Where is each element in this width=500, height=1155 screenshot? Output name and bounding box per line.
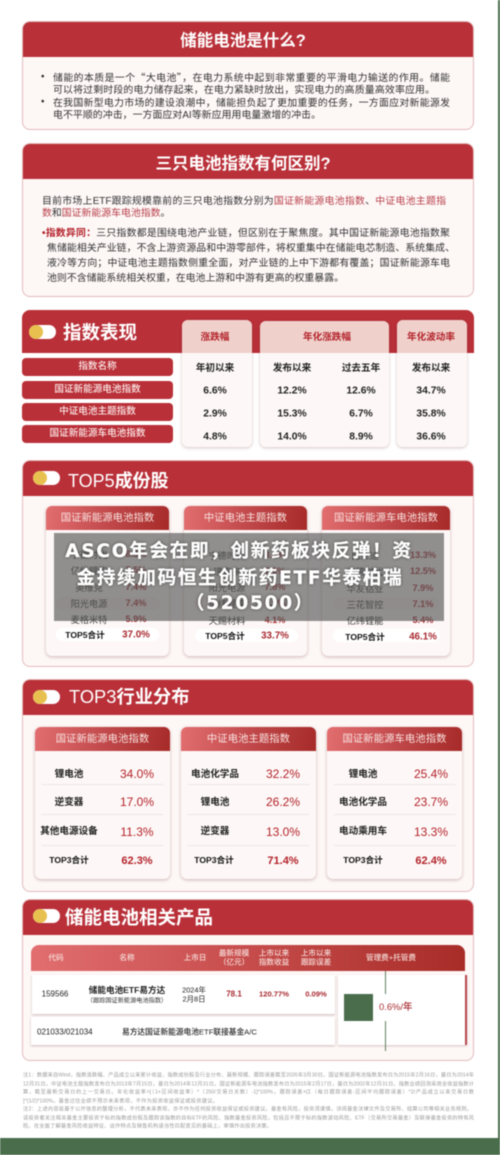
green marker line top bbox=[385, 971, 386, 994]
table row: 159566: 0.09% bbox=[305, 990, 327, 998]
table row: 159566: 2024年 bbox=[182, 986, 206, 994]
row label: CSI battery theme index bbox=[22, 403, 173, 421]
card: CSI battery theme top 5: 璞泰来 bbox=[213, 567, 241, 577]
card: CNI NEV battery top 5: 46.1% bbox=[409, 632, 437, 642]
table header: 上市以来 bbox=[301, 948, 331, 958]
column: price change bbox=[182, 320, 252, 447]
text block: index differences: 焦储能相关产业链，不含上游资源品和中游零部件，将权重集中在储能电芯制造、系统集成、 bbox=[47, 242, 455, 254]
card: CSI battery theme top 3 sectors: 逆变器 bbox=[201, 826, 229, 837]
card: CNI battery top 3 sectors: 国证新能源电池指数 bbox=[56, 734, 149, 745]
icon: toggle bbox=[33, 690, 60, 704]
column: price change: 2.9% bbox=[203, 408, 227, 420]
card: CNI NEV battery top 5 bbox=[322, 506, 450, 656]
panel: what is a storage battery bbox=[22, 21, 474, 130]
text block: storage battery explanation: 电不平顺的冲击，一方面应对AI等新应用用电量激增的冲击。 bbox=[53, 110, 321, 121]
row label: CNI battery index bbox=[22, 381, 173, 399]
heading: index differences: 三只电池指数有何区别? bbox=[155, 155, 331, 173]
card: CNI battery top 3 sectors bbox=[35, 727, 170, 879]
card: CNI battery top 5: 37.0% bbox=[122, 630, 150, 640]
card: CNI battery top 5: 7.4% bbox=[126, 598, 146, 608]
card: CNI NEV battery top 5: 7.1% bbox=[413, 599, 433, 609]
text block: storage battery explanation: • bbox=[41, 71, 44, 82]
card: CNI NEV battery top 5: 7.9% bbox=[413, 583, 433, 593]
row label: CNI NEV battery index: 国证新能源车电池指数 bbox=[50, 428, 145, 439]
column: price change: 涨跌幅 bbox=[201, 332, 229, 343]
bottom green band bbox=[0, 1138, 500, 1155]
column: price change: 年初以来 bbox=[196, 363, 234, 374]
card: CNI battery top 5: 7.4% bbox=[126, 582, 146, 592]
column: annualized return: 12.6% bbox=[346, 386, 376, 396]
table row: 159566: 120.77% bbox=[259, 990, 289, 998]
card: CNI NEV battery top 5: 亿纬锂能 bbox=[347, 616, 383, 626]
card: CNI battery top 5: 7.5% bbox=[126, 565, 146, 575]
panel: index performance bbox=[21, 309, 475, 354]
column: annualized volatility bbox=[397, 320, 467, 447]
table header: 指数收益 bbox=[259, 957, 289, 966]
row label: index name bbox=[22, 358, 173, 376]
text block: index differences: 目前市场上ETF跟踪规模靠前的三只电池指数分别为国证新能源电池指数、中证电池主题指 bbox=[42, 196, 446, 206]
text block: storage battery explanation: 储能的本质是一个“大电池”，在电力系统中起到非常重要的平滑电力输送的作用。储能 bbox=[53, 70, 450, 84]
card: CNI NEV battery top 3 sectors: 电动乘用车 bbox=[339, 826, 387, 837]
header bar: related products bbox=[22, 899, 474, 935]
card: CSI battery theme top 3 sectors: TOP3合计 bbox=[194, 855, 234, 865]
card: CNI battery top 5: 国证新能源电池指数 bbox=[61, 513, 154, 524]
card: CSI battery theme top 3 sectors: 13.0% bbox=[266, 825, 300, 839]
card: CNI battery top 5: 亿纬锂能 bbox=[71, 566, 107, 576]
footnotes: 算，截至最新交易日的上一交易日。年化收益率=[（1+区间收益率）*（250/交易日天数）-1]*100%，跟踪误差=(Σ（每日跟踪误差-区间平均跟踪误差）^2/产品成立以来交易日数 bbox=[23, 1090, 474, 1096]
overlay headline: 金持续加码恒生创新药ETF华泰柏瑞 bbox=[77, 568, 403, 589]
column: annualized volatility: 发布以来 bbox=[412, 363, 450, 374]
card: CNI battery top 3 sectors: 34.0% bbox=[120, 767, 154, 781]
table header bbox=[31, 945, 465, 971]
column: annualized return: 14.0% bbox=[277, 432, 307, 442]
header bar: index differences bbox=[22, 143, 474, 179]
heading: related products: 储能电池相关产品 bbox=[65, 907, 213, 928]
card: CNI NEV battery top 5: 国证新能源车电池指数 bbox=[334, 513, 438, 524]
card: CNI battery top 5: 英维克 bbox=[75, 583, 103, 593]
table row: 159566: 78.1 bbox=[226, 990, 242, 998]
text block: storage battery explanation: • bbox=[41, 96, 44, 107]
card: CSI battery theme top 5: 亿纬锂能 bbox=[209, 599, 245, 609]
table row: 159566: 159566 bbox=[42, 990, 68, 998]
card: CNI NEV battery top 3 sectors: 62.4% bbox=[415, 855, 447, 867]
panel: top 5 constituents bbox=[22, 460, 474, 667]
table row: 159566: （跟踪国证新能源电池指数） bbox=[87, 998, 167, 1004]
panel: difference between the three indices bbox=[22, 143, 474, 297]
text block: index differences: 数和国证新能源车电池指数。 bbox=[42, 208, 170, 219]
table header: 跟踪误差 bbox=[301, 957, 331, 966]
card: CNI battery top 3 sectors: 其他电源设备 bbox=[40, 826, 98, 837]
column: annualized return: 12.2% bbox=[277, 386, 307, 396]
row label: index name: 指数名称 bbox=[78, 361, 117, 372]
row label: CNI NEV battery index bbox=[22, 425, 173, 443]
card: CNI battery top 3 sectors: 17.0% bbox=[120, 795, 154, 809]
table header: （亿元） bbox=[219, 957, 249, 966]
card: CSI battery theme top 3 sectors: 中证电池主题指数 bbox=[207, 734, 290, 745]
table header: 上市以来 bbox=[259, 948, 289, 958]
card: CNI battery top 3 sectors: 11.3% bbox=[120, 825, 154, 839]
header bar: top 3 sectors bbox=[22, 679, 474, 715]
text block: storage battery explanation: 在我国新型电力市场的建设浪潮中，储能担负起了更加重要的任务，一方面应对新能源发 bbox=[53, 98, 450, 108]
card: CSI battery theme top 5 bbox=[184, 506, 307, 656]
text block: storage battery explanation: 可以将过剩时段的电力储存起来，在电力紧缺时放出，实现电力的高质量高效率应用。 bbox=[53, 85, 435, 96]
card: CNI battery top 5: 麦格米特 bbox=[71, 615, 107, 625]
table row: feeder fund bbox=[31, 1017, 335, 1045]
card: CNI battery top 5: 阳光电源 bbox=[71, 599, 107, 609]
fee value: 0.6%/年 bbox=[379, 1001, 412, 1012]
card: CSI battery theme top 5: 5.9% bbox=[265, 598, 285, 608]
fee cell bbox=[338, 975, 467, 1045]
text block: storage battery explanation bbox=[40, 70, 450, 121]
card: CSI battery theme top 5: 8.9% bbox=[265, 550, 285, 560]
text block: index differences: 液冷等方向；中证电池主题指数侧重全面，对产业链的上中下游都有覆盖；国证新能源车电 bbox=[47, 258, 450, 269]
card: CNI battery top 5 bbox=[46, 506, 169, 656]
card: CSI battery theme top 5: 7.8% bbox=[265, 582, 285, 592]
row label: CSI battery theme index: 中证电池主题指数 bbox=[59, 406, 136, 417]
card: CSI battery theme top 3 sectors: 32.2% bbox=[266, 767, 300, 781]
heading: top 5 constituents: TOP5成份股 bbox=[68, 471, 169, 491]
column: annualized volatility: 35.8% bbox=[416, 408, 446, 420]
header bar: index performance bbox=[22, 310, 474, 353]
header bar: what is a storage battery bbox=[22, 21, 474, 57]
card: CNI NEV battery top 5: TOP5合计 bbox=[345, 632, 385, 642]
card: CNI NEV battery top 5: 三花智控 bbox=[347, 600, 383, 610]
card: CNI NEV battery top 3 sectors: 电池化学品 bbox=[339, 797, 387, 808]
table row: 159566: 储能电池ETF易方达 bbox=[89, 985, 165, 995]
icon: toggle bbox=[33, 471, 60, 485]
table header: 名称 bbox=[119, 953, 135, 962]
card: CSI battery theme top 5: 宁德时代 bbox=[209, 551, 245, 561]
footnotes: 注2：上述内容是基于公开信息的整理分析，不代表未来表现，亦不作为任何投资收益保证或投资建议。基金有风险，投资须谨慎，详阅基金法律文件及交易所、结算公司等相关业务规则。 bbox=[23, 1106, 472, 1112]
column: annualized return bbox=[260, 321, 389, 447]
panel: top 3 sector distribution bbox=[22, 679, 474, 892]
card: CSI battery theme top 5: 天赐材料 bbox=[209, 616, 245, 626]
header bar: top 5 constituents bbox=[22, 460, 474, 496]
card: CNI NEV battery top 5: 13.3% bbox=[410, 550, 436, 560]
card: CNI battery top 3 sectors: 62.3% bbox=[121, 855, 153, 867]
heading: top 3 sectors: TOP3行业分布 bbox=[69, 686, 190, 707]
footnotes: 注1：数据来自Wind，指数涨跌幅、产品成立以来累计收益、指数成份股及行业分布、最新规模、跟踪误差截至2026年3月30日。国证新能源电池指数发布日为2015年2月16日，基日为2014年 bbox=[23, 1072, 474, 1078]
heading: what is a storage battery: 储能电池是什么? bbox=[180, 32, 306, 50]
footnotes: 请投资者关注相关基金主要投资于标的指数成份股及跟踪该指数的目标ETF的风险、指数基金投资风险，包括且不限于标的指数波动风险、ETF（交易所交易基金）及联接基金投资的特有风 bbox=[23, 1115, 474, 1121]
column: annualized volatility: 年化波动率 bbox=[407, 332, 455, 343]
card: CNI NEV battery top 3 sectors: 23.7% bbox=[414, 795, 448, 809]
table row: feeder fund: 021033/021034 bbox=[37, 1028, 93, 1036]
footnotes bbox=[22, 1072, 474, 1130]
row label: CNI battery index: 国证新能源电池指数 bbox=[54, 384, 141, 395]
table row: 159566 bbox=[32, 975, 335, 1014]
panel: related products bbox=[22, 899, 474, 1061]
table row: 159566: 2月8日 bbox=[182, 994, 206, 1004]
text block: index differences bbox=[42, 195, 455, 284]
card: CSI battery theme top 5: 7.0% bbox=[265, 566, 285, 576]
column: price change: 6.6% bbox=[203, 386, 227, 396]
card: CSI battery theme top 3 sectors: 71.4% bbox=[267, 855, 299, 867]
card: CSI battery theme top 3 sectors: 26.2% bbox=[266, 795, 300, 809]
card: CNI battery top 5: 8.8% bbox=[126, 549, 146, 559]
card: CSI battery theme top 3 sectors: 电池化学品 bbox=[191, 769, 239, 780]
icon: toggle bbox=[33, 909, 60, 923]
column: price change: 4.8% bbox=[203, 432, 227, 442]
footnotes: ]^(1/2)*100%。基金过往业绩不预示未来表现，不作为投资收益保证或投资建议。 bbox=[23, 1098, 218, 1104]
card: CNI NEV battery top 5: 华友钴业 bbox=[347, 584, 383, 594]
card: CNI NEV battery top 3 sectors bbox=[327, 727, 462, 879]
overlay banner bbox=[54, 533, 444, 621]
footnotes: 12月31日。中证电池主题指数发布日为2013年7月15日，基日为2014年12月31日。国证新能源车电池指数发布日为2015年2月17日，基日为2002年12月31日。指数业绩回测采用全收益指数计 bbox=[23, 1081, 474, 1087]
card: CNI NEV battery top 3 sectors: 锂电池 bbox=[349, 769, 377, 780]
table header: 上市日 bbox=[184, 953, 206, 962]
green marker line bottom bbox=[385, 1021, 386, 1051]
card: CNI NEV battery top 3 sectors: 国证新能源车电池指数 bbox=[343, 734, 446, 745]
card: CNI battery top 3 sectors: TOP3合计 bbox=[49, 855, 89, 865]
column: annualized return: 6.7% bbox=[349, 408, 373, 420]
table header: 最新规模 bbox=[219, 948, 249, 958]
text block: index differences: •指数异同：三只指数都是围绕电池产业链，但区别在于聚焦度。其中国证新能源电池指数聚 bbox=[42, 228, 450, 238]
right edge green strip bbox=[498, 0, 500, 1138]
card: CNI NEV battery top 5: 12.5% bbox=[410, 566, 436, 576]
overlay headline bbox=[64, 539, 413, 614]
card: CSI battery theme top 3 sectors: 锂电池 bbox=[201, 797, 229, 808]
card: CNI NEV battery top 5: 比亚迪 bbox=[351, 551, 379, 561]
card: CNI NEV battery top 3 sectors: 25.4% bbox=[414, 767, 448, 781]
column: annualized volatility: 34.7% bbox=[416, 386, 446, 396]
card: CNI battery top 3 sectors: 锂电池 bbox=[55, 769, 83, 780]
card: CNI NEV battery top 5: 宁德时代 bbox=[347, 567, 383, 577]
table header: 代码 bbox=[48, 953, 64, 962]
column: annualized return: 发布以来 bbox=[273, 363, 311, 374]
text block: index differences: 池则不含储能系统相关权重，在电池上游和中游有更高的权重暴露。 bbox=[47, 273, 344, 284]
card: CSI battery theme top 3 sectors bbox=[181, 727, 316, 879]
card: CSI battery theme top 5: 4.1% bbox=[265, 615, 285, 625]
card: CSI battery theme top 5: TOP5合计 bbox=[205, 631, 245, 641]
column: annualized return: 15.3% bbox=[277, 408, 307, 420]
column: annualized return: 过去五年 bbox=[342, 363, 380, 374]
card: CNI battery top 5: 5.9% bbox=[126, 614, 146, 624]
column: annualized return: 8.9% bbox=[349, 432, 373, 442]
overlay headline: （520500） bbox=[186, 593, 314, 614]
card: CNI battery top 5: 宁德时代 bbox=[71, 550, 107, 560]
card: CNI NEV battery top 5: 5.4% bbox=[413, 615, 433, 625]
card: CSI battery theme top 5: 33.7% bbox=[261, 630, 289, 642]
table row: feeder fund: 易方达国证新能源电池ETF联接基金A/C bbox=[122, 1028, 257, 1036]
column: annualized volatility: 36.6% bbox=[416, 432, 446, 442]
card: CSI battery theme top 5: 中证电池主题指数 bbox=[204, 513, 287, 524]
card: CNI battery top 5: TOP5合计 bbox=[65, 630, 105, 640]
green marker square bbox=[344, 994, 372, 1021]
overlay headline: ASCO年会在即，创新药板块反弹！资 bbox=[65, 541, 413, 562]
column: annualized return: 年化涨跌幅 bbox=[303, 332, 351, 343]
table header: 管理费+托管费 bbox=[366, 953, 416, 962]
icon: toggle bbox=[29, 325, 56, 339]
card: CNI NEV battery top 3 sectors: 13.3% bbox=[414, 825, 448, 839]
card: CSI battery theme top 5: 阳光电源 bbox=[209, 583, 245, 593]
card: CNI NEV battery top 3 sectors: TOP3合计 bbox=[343, 855, 383, 865]
footnotes: 险。在全面了解基金风险收益特征、运作特点及销售机构适当性匹配意见的基础上，审慎作出投资决策。 bbox=[23, 1124, 272, 1130]
heading: index performance: 指数表现 bbox=[63, 322, 137, 343]
card: CNI battery top 3 sectors: 逆变器 bbox=[55, 797, 83, 808]
